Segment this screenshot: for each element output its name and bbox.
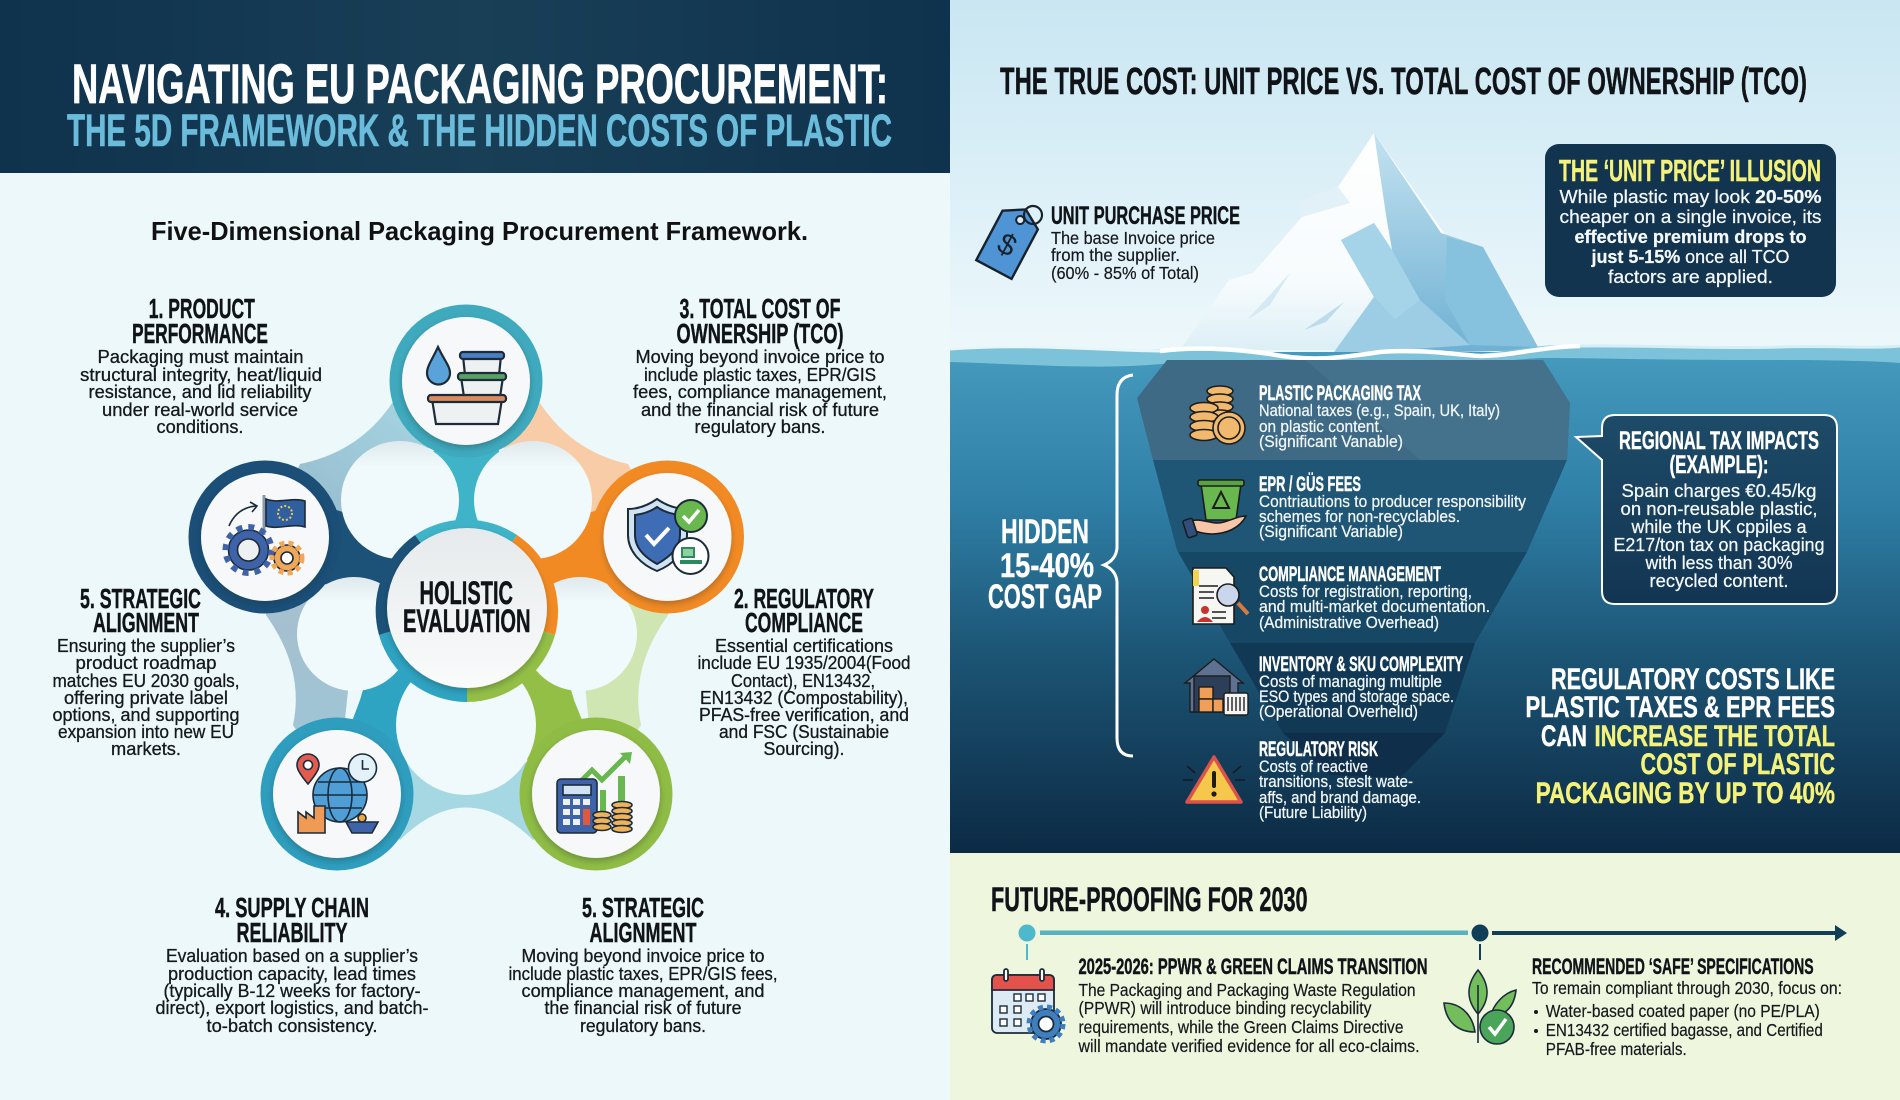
text: 5 strategic alignment bottom: ALIGNMENT <box>590 917 696 948</box>
layer: EPR fees: (Significant Variable) <box>1259 523 1403 541</box>
hub: holistic evaluation <box>387 528 547 688</box>
text: 5 strategic alignment left: product roadmap <box>76 653 216 673</box>
text: 3 total cost of ownership: OWNERSHIP (TCO) <box>676 318 844 349</box>
layer: regulatory risk: (Future Liability) <box>1259 804 1367 822</box>
text: safe specifications: Water-based coated paper (no PE/PLA) <box>1546 1001 1820 1021</box>
text: PPWR transition: will mandate verified evidence for all eco-claims. <box>1078 1036 1420 1056</box>
text: 4 supply chain reliability: (typically B-12 weeks for factory- <box>164 981 421 1001</box>
layer: compliance management: and multi-market documentation. <box>1259 598 1490 616</box>
text: 5 strategic alignment left: markets. <box>111 739 181 759</box>
callout: unit price illusion: While plastic may look 20-50% <box>1560 187 1822 207</box>
text: 1 product performance: conditions. <box>156 417 244 437</box>
callout: unit price illusion: just 5-15% once all TCO <box>1591 247 1790 267</box>
layer: compliance management: COMPLIANCE MANAGEMENT <box>1259 563 1441 586</box>
text: 2 regulatory compliance <box>698 583 910 759</box>
text: 1 product performance: PERFORMANCE <box>132 318 268 349</box>
text: 2 regulatory compliance: 2. REGULATORY <box>734 583 874 614</box>
text: 1 product performance <box>80 293 322 437</box>
text: 3 total cost of ownership: 3. TOTAL COST OF <box>680 293 840 324</box>
icon: coins <box>1190 386 1245 444</box>
text: safe specifications <box>1532 954 1842 1059</box>
text: 5 strategic alignment bottom: include plastic taxes, EPR/GIS fees, <box>508 964 778 984</box>
layer: regulatory risk: affs, and brand damage. <box>1259 789 1421 807</box>
text: 2 regulatory compliance: Sourcing). <box>764 739 844 759</box>
node: regulatory shield icon <box>591 460 744 614</box>
text: 5 strategic alignment left: offering private label <box>64 688 228 708</box>
icon: price tag <box>976 200 1043 279</box>
layer: inventory and SKU complexity: INVENTORY & SKU COMPLEXITY <box>1259 653 1463 676</box>
text: 5 strategic alignment bottom: compliance management, and <box>522 981 764 1001</box>
layer: inventory and SKU complexity: Costs of managing multiple <box>1259 673 1442 691</box>
text: 5 strategic alignment left: Ensuring the supplier’s <box>57 636 235 656</box>
text: 5 strategic alignment bottom: regulatory bans. <box>580 1016 706 1036</box>
layer: inventory and SKU complexity <box>1185 653 1463 721</box>
callout: unit price illusion: effective premium drops to <box>1574 227 1807 247</box>
layer: EPR fees: Contriautions to producer responsibility <box>1259 493 1527 511</box>
callout: regional tax impacts: (EXAMPLE): <box>1670 451 1768 479</box>
callout: regulatory costs statement: CAN <box>1541 720 1587 753</box>
text: 3 total cost of ownership: and the financial risk of future <box>641 400 879 420</box>
label: unit purchase price: from the supplier. <box>1051 245 1180 265</box>
panel: left framework <box>0 0 950 1100</box>
text: 4 supply chain reliability: RELIABILITY <box>236 917 348 948</box>
text: safe specifications: To remain compliant through 2030, focus on: <box>1532 978 1842 998</box>
callout: regional tax impacts: on non-reusable plastic, <box>1620 499 1818 519</box>
text: 1 product performance: resistance, and lid reliability <box>88 382 312 402</box>
label: hidden cost gap with brace: HIDDEN <box>1001 513 1089 551</box>
main title: THE 5D FRAMEWORK & THE HIDDEN COSTS OF PLASTIC <box>67 105 892 156</box>
text: 1 product performance: under real-world service <box>102 400 298 420</box>
icon: recycle bin in hand <box>1182 480 1246 538</box>
layer: regulatory risk: REGULATORY RISK <box>1259 738 1378 761</box>
icon: warning triangle <box>1183 757 1245 802</box>
text: PPWR transition: requirements, while the Green Claims Directive <box>1078 1017 1404 1037</box>
text: 1 product performance: Packaging must maintain <box>98 347 304 367</box>
layer: plastic packaging tax: on plastic content. <box>1259 418 1383 436</box>
callout: unit price illusion: factors are applied. <box>1608 267 1773 287</box>
layer: compliance management: Costs for registration, reporting, <box>1259 583 1472 601</box>
icon: price tag: $ <box>992 227 1022 264</box>
callout: regulatory costs statement <box>1526 663 1835 810</box>
layer: plastic packaging tax <box>1190 382 1500 451</box>
label: hidden cost gap with brace <box>988 375 1133 756</box>
hub ring <box>376 520 558 702</box>
node: strategic alignment icon <box>188 460 342 614</box>
text: safe specifications: PFAB-free materials. <box>1546 1039 1687 1059</box>
timeline arrow <box>1018 924 1847 960</box>
text: 4 supply chain reliability: Evaluation based on a supplier’s <box>166 946 418 966</box>
layer: plastic packaging tax: (Significant Vanable) <box>1259 433 1403 451</box>
header banner <box>0 0 950 173</box>
panel: future-proofing for 2030 <box>950 853 1900 1100</box>
section heading: Five-Dimensional Packaging Procurement Framework. <box>151 216 808 246</box>
layer: inventory and SKU complexity: ESO types and storage space. <box>1259 688 1454 706</box>
text: 2 regulatory compliance: Essential certifications <box>715 636 893 656</box>
layer: EPR fees: schemes for non-recyclables. <box>1259 508 1460 526</box>
layer: compliance management <box>1193 563 1490 632</box>
text: 3 total cost of ownership <box>633 293 887 437</box>
text: 3 total cost of ownership: include plastic taxes, EPR/GIS <box>644 365 876 385</box>
text: 4 supply chain reliability: production capacity, lead times <box>168 964 416 984</box>
text: 5 strategic alignment left: ALIGNMENT <box>93 607 199 638</box>
node: supply chain icon <box>260 718 414 870</box>
layer: plastic packaging tax: PLASTIC PACKAGING TAX <box>1259 382 1421 405</box>
text: 2 regulatory compliance: PFAS-free verification, and <box>699 705 909 725</box>
text: 5 strategic alignment left: expansion into new EU <box>58 722 234 742</box>
text: PPWR transition: The Packaging and Packaging Waste Regulation <box>1078 980 1416 1000</box>
layer: regulatory risk: transitions, steslt wate- <box>1259 773 1413 791</box>
layer: EPR fees <box>1182 473 1527 541</box>
callout: regional tax impacts: while the UK cppiles a <box>1631 517 1807 537</box>
node: cost calculator icon <box>520 718 672 870</box>
hub and spoke diagram <box>188 304 744 870</box>
main title <box>67 52 892 156</box>
text: 2 regulatory compliance: EN13432 (Compostability), <box>700 688 908 708</box>
node: product performance icon <box>390 304 542 458</box>
text: 5 strategic alignment bottom: 5. STRATEGIC <box>582 892 704 923</box>
label: unit purchase price: (60% - 85% of Total) <box>1051 263 1199 283</box>
callout: unit price illusion <box>1545 144 1836 297</box>
text: 3 total cost of ownership: Moving beyond invoice price to <box>636 347 884 367</box>
hub: holistic evaluation: HOLISTIC <box>420 575 513 611</box>
layer: regulatory risk <box>1183 738 1421 822</box>
text: 5 strategic alignment bottom: Moving beyond invoice price to <box>522 946 764 966</box>
text: 2 regulatory compliance: and FSC (Sustainabie <box>719 722 889 742</box>
layer: compliance management: (Administrative Overhead) <box>1259 614 1439 632</box>
icon: warehouse <box>1185 659 1248 715</box>
callout: regional tax impacts: Spain charges €0.45/kg <box>1622 481 1816 501</box>
hub: holistic evaluation: EVALUATION <box>403 603 530 639</box>
text: PPWR transition: (PPWR) will introduce binding recyclability <box>1078 998 1372 1018</box>
iceberg above water <box>1180 133 1538 355</box>
callout: unit price illusion: cheaper on a single invoice, its <box>1560 207 1822 227</box>
layer: plastic packaging tax: National taxes (e.g., Spain, UK, Italy) <box>1259 402 1500 420</box>
text: 4 supply chain reliability <box>156 892 429 1036</box>
callout: regional tax impacts: recycled content. <box>1650 571 1788 591</box>
water <box>950 345 1900 853</box>
text: 2 regulatory compliance: Contact), EN13432, <box>731 671 875 691</box>
text: 5 strategic alignment left: 5. STRATEGIC <box>80 583 201 614</box>
text: PPWR transition: 2025-2026: PPWR & GREEN CLAIMS TRANSITION <box>1078 954 1428 979</box>
text: 4 supply chain reliability: direct), export logistics, and batch- <box>156 998 429 1018</box>
text: 5 strategic alignment left <box>52 583 240 759</box>
icon: calendar with gear <box>992 969 1063 1041</box>
text: 5 strategic alignment bottom <box>508 892 778 1036</box>
label: unit purchase price <box>976 200 1240 283</box>
layer: regulatory risk: Costs of reactive <box>1259 758 1368 776</box>
text: safe specifications: EN13432 certified bagasse, and Certified <box>1546 1020 1823 1040</box>
panel: iceberg total cost of ownership <box>950 0 1900 853</box>
label: hidden cost gap with brace: 15-40% <box>1000 547 1094 585</box>
text: 1 product performance: 1. PRODUCT <box>149 293 255 324</box>
label: unit purchase price: The base Invoice price <box>1051 228 1215 248</box>
text: 1 product performance: structural integrity, heat/liquid <box>80 365 322 385</box>
label: unit purchase price: UNIT PURCHASE PRICE <box>1051 202 1240 230</box>
callout: regional tax impacts: E217/ton tax on packaging <box>1614 535 1824 555</box>
text: 5 strategic alignment bottom: the financial risk of future <box>544 998 742 1018</box>
main title: NAVIGATING EU PACKAGING PROCUREMENT: <box>72 52 888 115</box>
layer: EPR fees: EPR / GÜS FEES <box>1259 473 1361 496</box>
text: 2 regulatory compliance: include EU 1935/2004(Food <box>698 653 910 673</box>
text: 5 strategic alignment left: options, and supporting <box>52 705 240 725</box>
icon: leaves with check <box>1444 970 1516 1044</box>
text: 3 total cost of ownership: regulatory bans. <box>694 417 826 437</box>
callout: regional tax impacts: with less than 30% <box>1645 553 1792 573</box>
heading: future proofing: FUTURE-PROOFING FOR 2030 <box>991 881 1308 919</box>
layer: inventory and SKU complexity: (Operational Overhelıd) <box>1259 703 1418 721</box>
text: 4 supply chain reliability: to-batch consistency. <box>206 1016 378 1036</box>
text: 2 regulatory compliance: COMPLIANCE <box>745 607 863 638</box>
icon: document and magnifier <box>1193 568 1248 624</box>
iceberg below water: cost layers <box>1130 355 1580 783</box>
label: hidden cost gap with brace: COST GAP <box>988 578 1102 616</box>
text: 4 supply chain reliability: 4. SUPPLY CHAIN <box>215 892 369 923</box>
text: 3 total cost of ownership: fees, compliance management, <box>633 382 887 402</box>
text: PPWR transition <box>1078 954 1428 1056</box>
callout: regional tax impacts <box>1576 415 1837 604</box>
text: 5 strategic alignment left: matches EU 2030 goals, <box>52 671 240 691</box>
